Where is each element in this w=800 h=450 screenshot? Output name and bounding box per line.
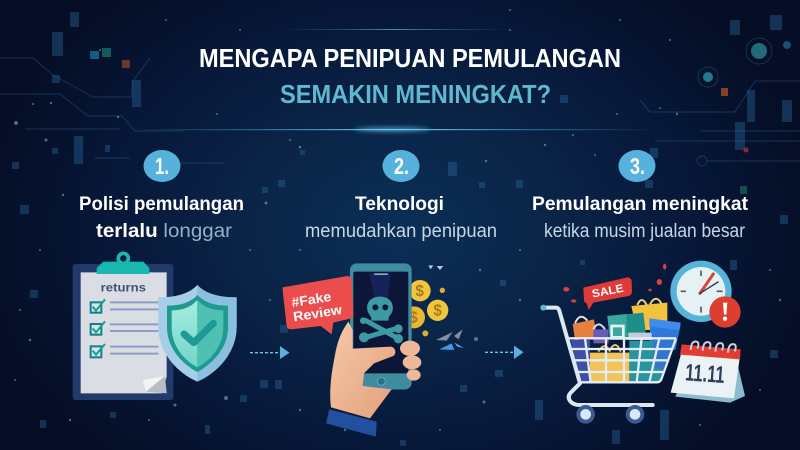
returns label: returns [101,282,146,295]
sale tag: SALE [591,283,625,301]
heading: polisi pemulangan: Polisi pemulangan [79,193,244,215]
coins [403,280,448,336]
cart frame [566,338,676,382]
subheading: terlalu longgar: terlalu longgar [96,220,233,242]
number badge 1 [144,150,180,182]
fake review bubble: Review [292,302,344,324]
alert badge [709,296,741,328]
step 2 heading [305,150,497,242]
calendar [671,341,745,403]
coins: $ [415,283,424,300]
confetti [563,264,666,303]
step 1 heading [79,150,244,242]
title divider glow [130,128,660,132]
subheading: memudahkan penipuan: memudahkan penipuan [305,221,497,242]
clipboard board [73,264,173,400]
page curl [143,376,167,393]
wheels [576,405,644,424]
paper [81,272,167,393]
shield [158,285,237,382]
subheading: ketika musim jualan besar: ketika musim jualan besar [544,221,746,242]
cuff [326,409,377,437]
coins: $ [409,310,418,327]
title [199,45,621,109]
checklist [91,299,158,357]
sale tag [583,277,632,310]
clip [97,253,149,274]
heading: pemulangan meningkat: Pemulangan meningkat [532,193,748,215]
fake review bubble: #Fake [290,289,332,310]
heading: teknologi: Teknologi [355,193,444,215]
shards [428,265,464,350]
icon: shopping cart, clock and calendar [540,261,745,424]
cart handle and base [543,308,653,405]
icon: phone with skull and fake review [283,263,464,437]
number badge 3 [618,150,656,182]
phone [350,263,412,389]
arrow: step 1 to 2 [250,346,290,359]
bags [571,299,681,382]
arrow: step 2 to 3 [485,346,524,359]
decorative top glow [280,29,510,30]
number badge 2 [382,150,420,182]
step 3 heading [532,150,748,242]
title: MENGAPA PENIPUAN PEMULANGAN [199,45,621,73]
number badge 3: 3. [630,153,645,179]
number badge 1: 1. [155,153,169,179]
clock [670,261,732,322]
skull and crossbones [359,297,403,343]
fake review bubble [283,276,353,334]
hand [330,322,421,418]
icon: clipboard with shield [73,253,237,400]
number badge 2: 2. [394,153,409,179]
title: SEMAKIN MENINGKAT? [280,81,551,109]
coins: $ [433,303,442,320]
calendar: 11.11 [684,359,726,389]
